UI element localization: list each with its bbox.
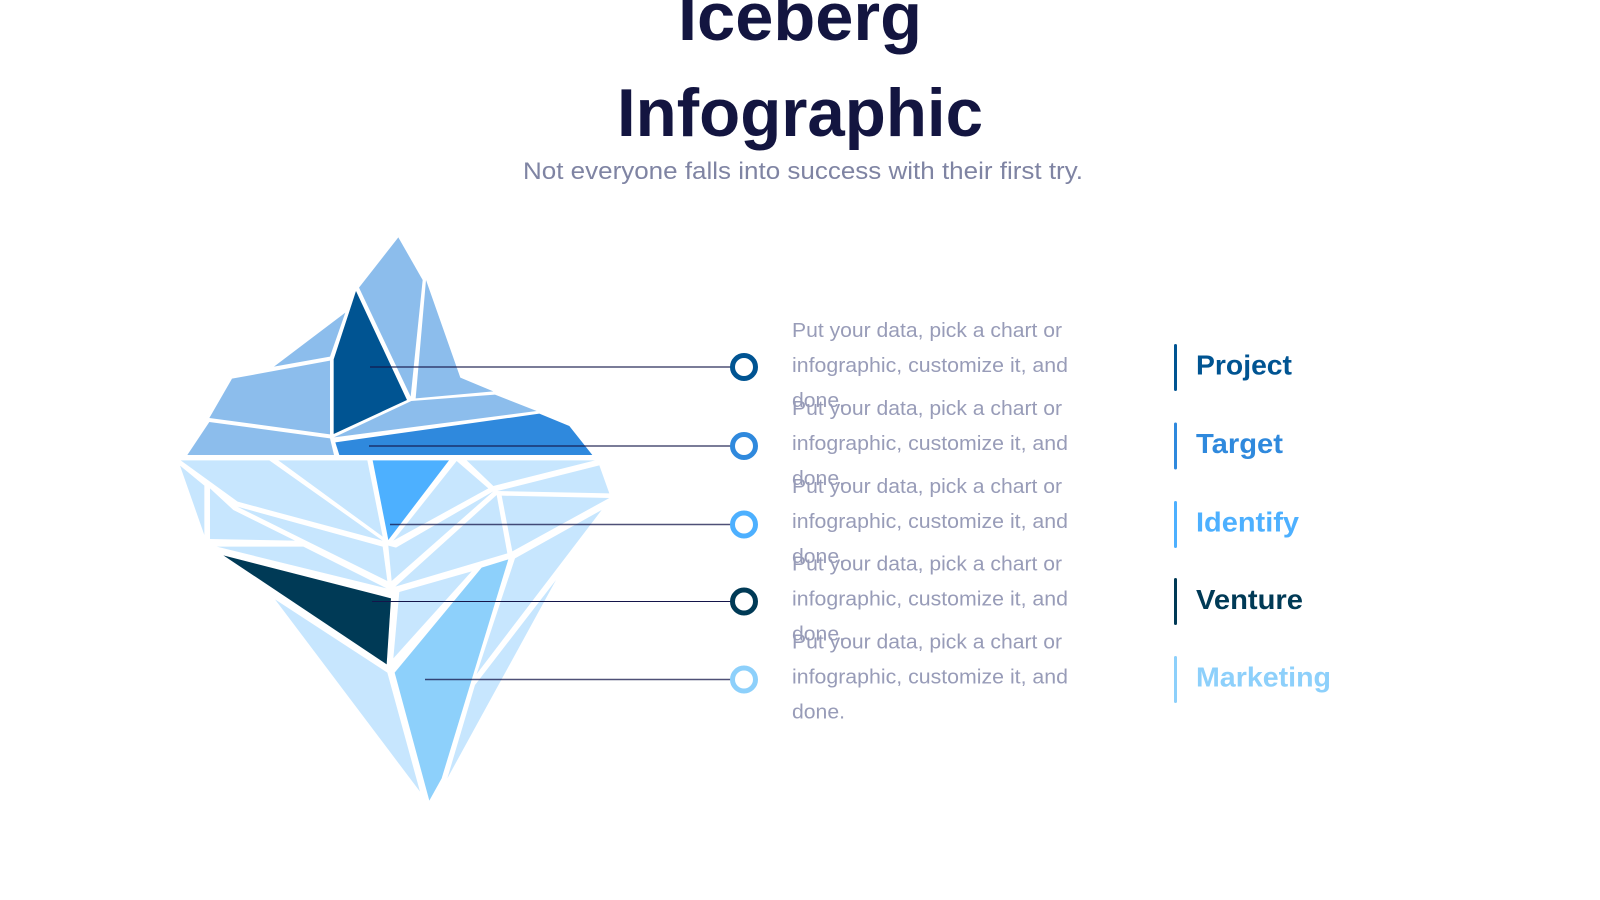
legend: venture: Venture [1196, 584, 1303, 615]
legend: marketing [1174, 656, 1331, 703]
description 5: done. [792, 702, 845, 724]
description 1: infographic, customize it, and [792, 355, 1068, 377]
iceberg below water [180, 460, 609, 801]
legend: project [1174, 344, 1292, 391]
description 3: infographic, customize it, and [792, 511, 1068, 533]
iceberg illustration [180, 237, 609, 801]
description 4 [792, 554, 1068, 646]
description 5: infographic, customize it, and [792, 666, 1068, 688]
description 3: Put your data, pick a chart or [792, 476, 1062, 498]
legend: project: Project [1196, 350, 1292, 380]
title: Infographic [617, 75, 983, 151]
connector 1 [370, 356, 756, 378]
iceberg above water [187, 237, 592, 455]
segment: target [335, 414, 592, 455]
legend: identify [1174, 501, 1299, 548]
description 5: Put your data, pick a chart or [792, 632, 1062, 654]
description 3: done. [792, 546, 845, 568]
description 2: done. [792, 468, 845, 490]
segment: project [334, 291, 407, 434]
legend: marketing: Marketing [1196, 662, 1331, 692]
description 2 [792, 398, 1068, 490]
description 4: Put your data, pick a chart or [792, 554, 1062, 576]
connector 4 [372, 590, 756, 613]
description 5 [792, 632, 1068, 724]
description 4: infographic, customize it, and [792, 588, 1068, 610]
description 3 [792, 476, 1068, 568]
legend: target: Target [1196, 428, 1283, 459]
description 1 [792, 320, 1068, 412]
connector 3 [390, 513, 756, 536]
description 4: done. [792, 624, 845, 646]
segment: identify [373, 460, 449, 540]
connector 5 [425, 668, 756, 691]
description 2: infographic, customize it, and [792, 433, 1068, 455]
legend: venture [1174, 578, 1303, 625]
connector 2 [369, 434, 756, 458]
segment: venture [223, 555, 391, 664]
title [617, 0, 983, 151]
description 2: Put your data, pick a chart or [792, 398, 1062, 420]
legend: target [1174, 422, 1283, 470]
description 1: done. [792, 390, 845, 412]
legend: identify: Identify [1196, 506, 1299, 538]
segment: marketing [395, 559, 508, 801]
description 1: Put your data, pick a chart or [792, 320, 1062, 342]
subtitle: Not everyone falls into success with their first try. [523, 158, 1083, 185]
